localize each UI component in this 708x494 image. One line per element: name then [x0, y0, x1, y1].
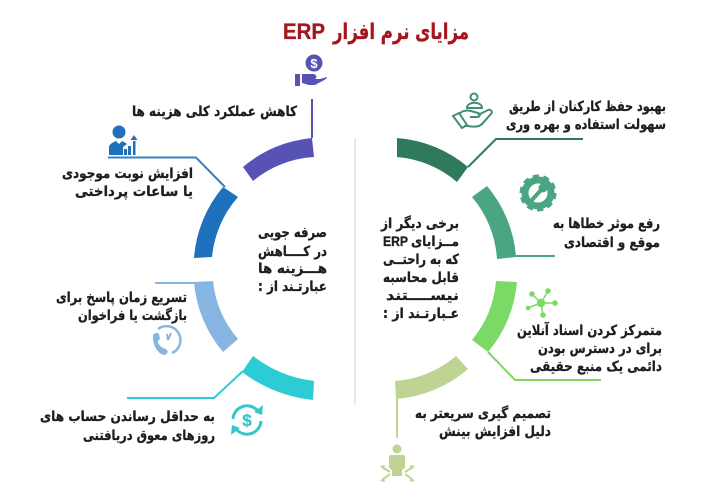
text: center left: عبارتـند از :	[258, 279, 327, 295]
arc: teal	[472, 186, 516, 259]
text: dark green	[506, 99, 666, 133]
connector: cyan	[127, 371, 243, 398]
icon: dollar cycle	[231, 405, 263, 435]
text: center right: نیســــتند	[386, 288, 459, 304]
arc: blue	[194, 187, 238, 258]
icon: gear with wrench	[522, 176, 554, 210]
text: sage: تصمیم گیری سریعتر به	[415, 405, 551, 422]
text: center left: صرفه جویی	[258, 225, 327, 241]
icon: dollar cycle: $	[242, 411, 252, 430]
connector: sage	[396, 399, 398, 438]
arc: sage	[395, 356, 468, 399]
text: center right: ERP	[383, 233, 408, 249]
text: center right: عـبارتـند از :	[383, 306, 459, 322]
icon: dollar in hand: $	[310, 56, 318, 71]
arc: light green	[472, 281, 517, 352]
text: light green: متمرکز کردن اسناد آنلاین	[517, 321, 662, 339]
title	[283, 19, 469, 45]
text: blue: یا ساعات پرداختی	[75, 184, 193, 200]
text: center right: که به راحتــی	[383, 252, 460, 268]
icon: person with arrows	[380, 444, 415, 482]
text: dark green: بهبود حفظ کارکنان از طریق	[509, 99, 666, 115]
segment: teal errors	[472, 176, 660, 259]
icon: network nodes	[526, 289, 557, 317]
icon: hand with person	[453, 94, 492, 128]
text: light green: دائمی یک منبع حقیقی	[530, 359, 662, 375]
segment: cyan receivables	[40, 356, 314, 444]
icon: dollar in hand	[295, 54, 327, 86]
segment: light blue response time	[56, 281, 238, 355]
text: center left: در کــــاهش	[258, 244, 327, 260]
text: light blue	[56, 290, 187, 324]
text: teal: موقع و اقتصادی	[564, 235, 660, 251]
title: ERP	[283, 19, 325, 44]
text: blue: افزایش نوبت موجودی	[62, 166, 193, 182]
text: center left: هـــزینه ها	[258, 261, 327, 277]
arc: purple	[243, 138, 314, 181]
text: dark green: سهولت استفاده و بهره وری	[506, 117, 666, 133]
text: center left	[258, 225, 327, 295]
text: blue	[62, 166, 193, 200]
segment: dark green retention	[397, 94, 666, 182]
text: light green: برای در دسترس بودن	[538, 341, 662, 357]
segment: sage decisions	[380, 356, 551, 482]
text: sage	[415, 405, 551, 440]
connector: teal	[497, 255, 555, 257]
arc: cyan	[242, 356, 314, 400]
text: cyan: به حداقل رساندن حساب های	[40, 409, 215, 425]
text: cyan	[40, 409, 215, 444]
arc: light blue	[194, 281, 238, 352]
text: center right	[380, 215, 460, 322]
text: center right: قابل محاسبه	[383, 270, 459, 286]
title: مزایای نرم افزار	[332, 20, 469, 45]
segment: purple cost reduction	[132, 54, 327, 181]
connector: light green	[488, 352, 601, 380]
text: light blue: بازگشت یا فراخوان	[78, 307, 187, 324]
text: center right: برخی دیگر از	[380, 215, 459, 232]
arc: dark green	[397, 138, 468, 182]
text: light blue: تسریع زمان پاسخ برای	[56, 290, 187, 306]
text: purple: کاهش عملکرد کلی هزینه ها	[132, 104, 298, 120]
segment: light green documents	[472, 281, 662, 380]
text: sage: دلیل افزایش بینش	[439, 424, 551, 440]
text: teal: رفع موثر خطاها به	[553, 216, 660, 232]
connector: blue	[108, 158, 225, 187]
icon: person with growth chart	[109, 126, 138, 155]
text: cyan: روزهای معوق دریافتنی	[83, 428, 215, 444]
connector: dark green	[468, 139, 583, 167]
text: center right: مــزایای	[411, 234, 459, 250]
connector: light blue	[155, 282, 195, 284]
text: light green	[517, 321, 662, 375]
connector: purple	[311, 99, 313, 138]
segment: blue inventory	[62, 126, 238, 258]
text: teal	[553, 216, 660, 251]
icon: phone and clock	[153, 326, 180, 355]
